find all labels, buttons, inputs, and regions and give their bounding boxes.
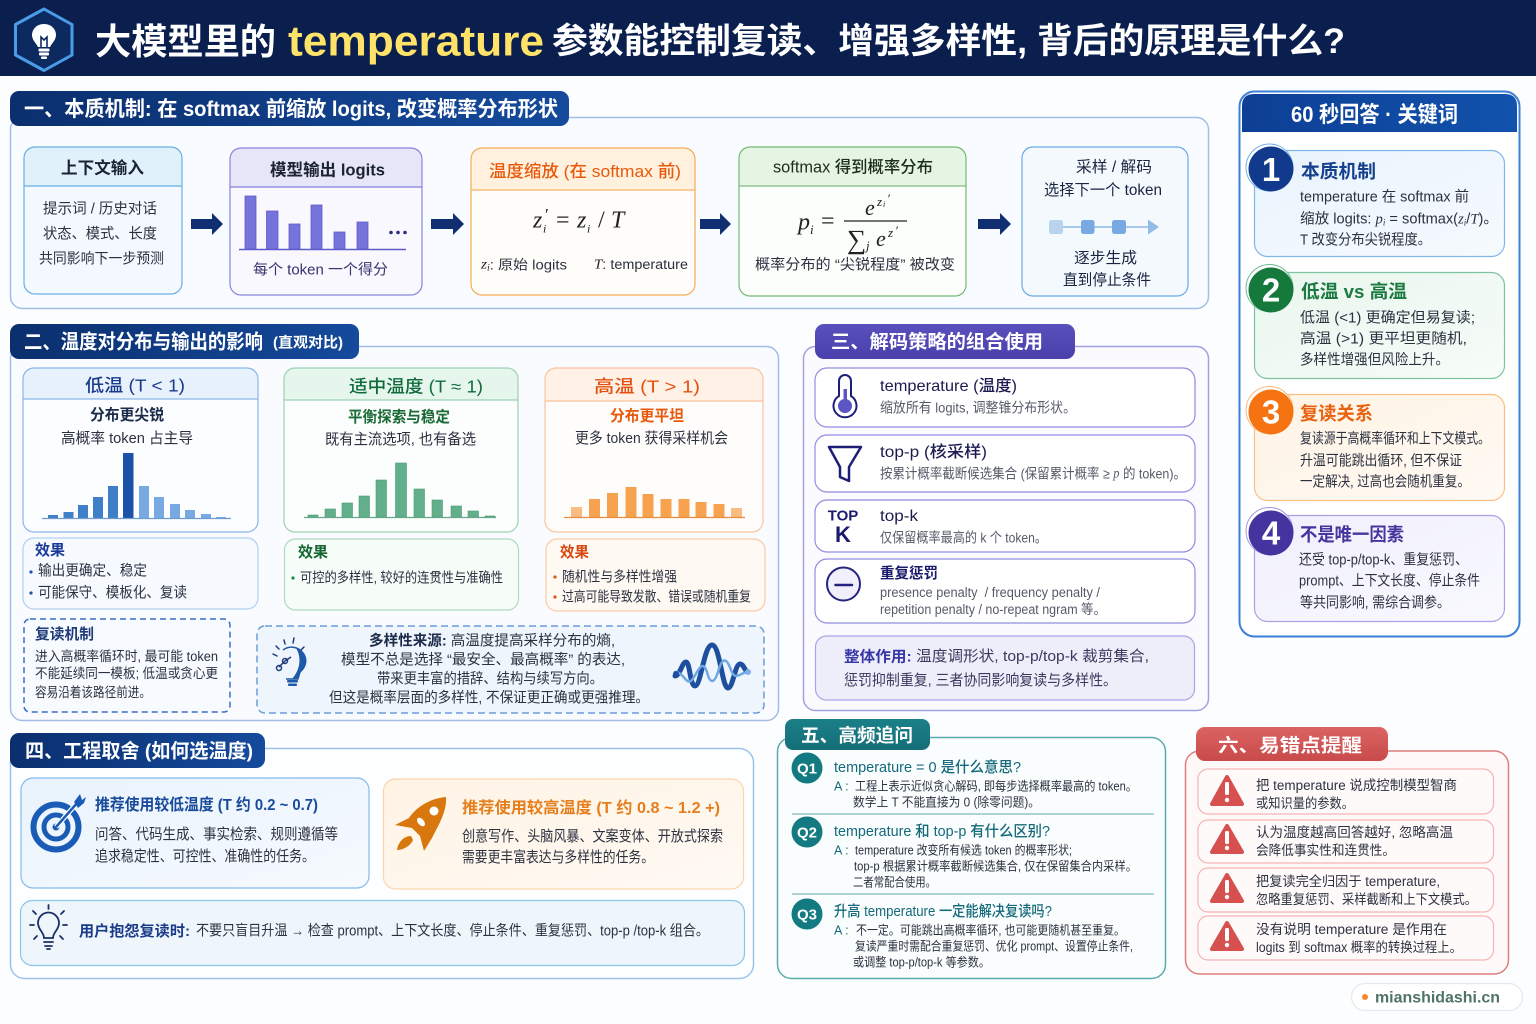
heading: section 4 (10, 733, 265, 768)
card: temperature scaling (471, 148, 695, 295)
card: high temperature recommendation (384, 779, 744, 889)
card: low temperature recommendation (21, 778, 369, 888)
arrow (431, 213, 464, 235)
mistake 4: logits 到 softmax 概率的转换过程上。 (1256, 939, 1462, 955)
title (95, 18, 1345, 66)
bar chart: logits (239, 196, 407, 250)
formula: scaling: z (532, 208, 543, 234)
card: 4 not only factor (1246, 508, 1504, 622)
Q3 (792, 898, 1133, 970)
panel: section 1 mechanism (10, 91, 1208, 308)
card: low temperature (23, 368, 258, 532)
Q1: Q1 (797, 760, 817, 778)
card: moderate temperature: 平衡探索与稳定 (348, 407, 450, 426)
card: high temperature recommendation: 创意写作、头脑风暴、文案变体、开放式探索 (462, 827, 723, 845)
card: 4 not only factor: 4 (1262, 514, 1281, 552)
panel: section 3 decoding strategies (804, 324, 1208, 710)
card: temperature scaling: T: temperature (594, 257, 688, 272)
card: high temperature: 分布更平坦 (610, 406, 684, 425)
card: softmax: softmax 得到概率分布 (773, 158, 933, 176)
callout: user complains about repetition: 不要只盲目升温 → 检查 prompt、上下文长度、停止条件、重复惩罚、top-p /top-k 组合。 (196, 922, 709, 940)
heading: section 1 (10, 91, 569, 126)
panel: section 6 common mistakes (1186, 727, 1508, 974)
Q3: 不一定。可能跳出高概率循环, 也可能更随机甚至重复。 (856, 922, 1125, 938)
card: 3 repetition: 一定解决, 过高也会随机重复。 (1300, 472, 1470, 490)
Q2: temperature 改变所有候选 token 的概率形状; (855, 842, 1072, 858)
card: low temperature: 低温 (T < 1) (85, 376, 185, 396)
card: 2 low vs high: 2 (1262, 272, 1280, 308)
card: low temperature: 高概率 token 占主导 (61, 430, 193, 447)
row: temperature: temperature (温度) (880, 376, 1017, 395)
Q1: temperature = 0 是什么意思? (834, 758, 1021, 776)
mistake 1: 把 temperature 说成控制模型智商 (1256, 778, 1457, 793)
icon: warning (1212, 777, 1242, 804)
card: high temperature: 更多 token 获得采样机会 (575, 430, 728, 447)
card: 3 repetition: 复读关系 (1300, 403, 1373, 424)
effect: high temperature: 效果 (560, 543, 589, 561)
row: repetition penalty: 重复惩罚 (880, 564, 938, 582)
title: 大模型里的 (95, 21, 276, 62)
card: sampling decode (1022, 147, 1188, 296)
card: 1 essence: = softmax( (1385, 212, 1458, 228)
card: 1 essence: 缩放 logits: p (1300, 212, 1383, 228)
effect: moderate temperature: 可控的多样性, 较好的连贯性与准确性 (300, 570, 503, 586)
effect: low temperature: 可能保守、模板化、复读 (38, 584, 187, 602)
row: repetition penalty (815, 559, 1195, 623)
icon: top k: K (835, 522, 851, 547)
card: 3 repetition (1246, 386, 1504, 500)
formula: softmax: e (876, 226, 886, 251)
icon: thermometer (834, 375, 856, 417)
callout: repetition mechanism: 进入高概率循环时, 最可能 token (35, 648, 218, 664)
effect: moderate temperature: 效果 (298, 543, 328, 561)
callout: user complains about repetition (20, 900, 744, 966)
Q3: Q3 (797, 906, 817, 924)
card: 1 essence: 本质机制 (1301, 161, 1376, 182)
icon: idea bulb (273, 638, 306, 686)
formula: scaling (532, 205, 626, 236)
row: temperature (815, 368, 1195, 427)
icon: top k (828, 508, 858, 547)
arrow (191, 213, 223, 235)
watermark pill: mianshidashi.cn (1375, 990, 1500, 1006)
card: context input: 状态、模式、长度 (43, 226, 157, 242)
formula: scaling: = (556, 208, 570, 234)
Q1: A : (834, 780, 849, 794)
callout: repetition mechanism: 复读机制 (35, 626, 94, 643)
icon: bulb outline (30, 905, 67, 949)
card: context input: 共同影响下一步预测 (39, 250, 164, 268)
card: moderate temperature (284, 368, 518, 532)
card: high temperature recommendation: 推荐使用较高温度 (T 约 0.8 ~ 1.2 +) (462, 798, 720, 817)
card: 2 low vs high: 低温 (<1) 更确定但易复读; (1300, 308, 1475, 326)
mistake 3: 把复读完全归因于 temperature, (1256, 873, 1440, 889)
arrow (978, 213, 1011, 235)
card: 4 not only factor: 还受 top-p/top-k、重复惩罚、 (1299, 550, 1468, 568)
formula: softmax: ∑ (847, 224, 866, 254)
formula: softmax: e (865, 195, 875, 220)
arrow (700, 213, 731, 235)
row: top-p: top-p (核采样) (880, 443, 987, 461)
formula: softmax: p (796, 210, 810, 236)
card: sampling decode: 采样 / 解码 (1076, 158, 1152, 176)
callout: source of diversity (257, 626, 764, 713)
Q1: 工程上表示近似贪心解码, 即每步选择概率最高的 token。 (855, 778, 1137, 794)
card: temperature scaling: : 原始 logits (490, 257, 567, 272)
mistake 4: 没有说明 temperature 是作用在 (1256, 922, 1447, 937)
card: model output logits: 每个 token 一个得分 (253, 262, 388, 278)
card: temperature scaling: z (480, 257, 488, 272)
effect: high temperature (546, 539, 765, 611)
card: moderate temperature: 既有主流选项, 也有备选 (325, 431, 476, 448)
title: 参数能控制复读、增强多样性, 背后的原理是什么? (552, 22, 1345, 61)
title: temperature (288, 18, 544, 66)
card: 1 essence: / (1466, 212, 1471, 228)
mistake 2: 认为温度越高回答越好, 忽略高温 (1256, 824, 1453, 840)
heading: section 5 (785, 719, 930, 750)
card: model output logits: 模型输出 logits (270, 160, 385, 180)
Q1: 数学上 T 不能直接为 0 (除零问题)。 (853, 794, 1040, 810)
row: top-k (815, 500, 1195, 552)
heading: section 5: 五、高频追问 (801, 725, 913, 746)
bar chart: high temperature distribution (564, 487, 745, 518)
card: 1 essence: T)。 (1470, 212, 1498, 228)
icon: warning (1212, 923, 1242, 949)
icon: top k: TOP (828, 508, 858, 524)
effect: low temperature (23, 538, 258, 609)
formula: scaling: i (543, 222, 546, 236)
card: low temperature recommendation: 问答、代码生成、事实检索、规则遵循等 (95, 825, 338, 843)
formula: softmax: z (887, 225, 893, 240)
bar chart: moderate temperature distribution (304, 463, 496, 518)
icon: warning (1212, 875, 1242, 901)
row: top-p: 按累计概率截断候选集合 (保留累计概率 ≥ p 的 token)。 (880, 466, 1186, 482)
callout: repetition mechanism: 不能延续同一模板; 低温或贪心更 (35, 666, 218, 681)
formula: scaling: T (611, 208, 626, 234)
card: 4 not only factor: 等共同影响, 需综合调参。 (1300, 594, 1450, 612)
callout: repetition mechanism: 容易沿着该路径前进。 (35, 684, 151, 700)
heading: section 4: 四、工程取舍 (如何选温度) (25, 740, 253, 762)
Q3: A : (834, 924, 849, 938)
icon: token chain (1049, 220, 1159, 234)
heading: 60 second answer (1242, 94, 1517, 132)
row: top-k: top-k (880, 508, 919, 525)
formula: scaling: i (587, 222, 590, 236)
row: repetition penalty: presence penalty / frequency penalty / (880, 585, 1100, 600)
Q2: temperature 和 top-p 有什么区别? (834, 823, 1050, 840)
heading: 60 second answer: 60 秒回答 · 关键词 (1291, 102, 1458, 127)
card: 1 essence: i (1383, 218, 1386, 228)
heading: section 3: 三、解码策略的组合使用 (831, 331, 1043, 353)
card: low temperature: 分布更尖锐 (90, 405, 164, 424)
Q3: 升高 temperature 一定能解决复读吗? (834, 902, 1052, 920)
card: 2 low vs high: 多样性增强但风险上升。 (1300, 352, 1449, 368)
watermark pill (1352, 984, 1522, 1010)
row: repetition penalty: repetition penalty / no-repeat ngram 等。 (880, 601, 1106, 617)
mistake 4 (1198, 916, 1494, 960)
row: temperature: 缩放所有 logits, 调整锥分布形状。 (880, 400, 1076, 416)
effect: high temperature: 过高可能导致发散、错误或随机重复 (562, 588, 751, 604)
icon: funnel (829, 447, 861, 481)
panel: section 4 engineering trade-offs (10, 733, 754, 978)
callout: overall effect: 惩罚抑制重复, 三者协同影响复读与多样性。 (844, 671, 1117, 689)
icon: rocket (395, 797, 446, 851)
callout: repetition mechanism (24, 619, 230, 712)
formula: softmax: ′ (895, 223, 898, 238)
icon: warning (1212, 826, 1242, 852)
icon: target (34, 794, 86, 850)
effect: low temperature: 输出更确定、稳定 (38, 562, 147, 580)
callout: overall effect: 整体作用: 温度调形状, top-p/top-k 裁剪集合, (844, 647, 1149, 665)
panel: 60 second answer (1240, 92, 1520, 636)
panel: section 5 follow-up questions (778, 719, 1166, 978)
card: softmax (739, 147, 966, 296)
card: temperature scaling: 温度缩放 (在 softmax 前) (489, 162, 681, 181)
callout: user complains about repetition: 用户抱怨复读时: (79, 922, 190, 940)
heading: section 1: 一、本质机制: 在 softmax 前缩放 logits, 改变概率分布形状 (24, 97, 558, 121)
card: 2 low vs high: 低温 vs 高温 (1301, 281, 1407, 302)
heading: section 2 (10, 324, 359, 359)
card: high temperature: 高温 (T > 1) (594, 376, 700, 396)
Q2: A : (834, 844, 849, 858)
callout: source of diversity: 但这是概率层面的多样性, 不保证更正确或更强推理。 (329, 690, 649, 706)
callout: overall effect (816, 636, 1194, 700)
card: 1 essence (1246, 144, 1504, 256)
mistake 2 (1198, 820, 1494, 863)
card: 2 low vs high (1246, 264, 1504, 378)
formula: softmax: ′ (887, 191, 890, 206)
Q2: Q2 (797, 824, 817, 842)
Q3: 或调整 top-p/top-k 等参数。 (853, 954, 990, 970)
card: high temperature (545, 368, 763, 532)
card: 1 essence: z (1457, 212, 1464, 228)
card: softmax: 概率分布的 “尖锐程度” 被改变 (755, 256, 955, 274)
card: low temperature recommendation: 推荐使用较低温度 (T 约 0.2 ~ 0.7) (95, 795, 318, 814)
card: temperature scaling: i (487, 262, 490, 272)
effect: low temperature: 效果 (35, 541, 65, 559)
card: context input (24, 147, 182, 294)
heading: section 2: (直观对比) (273, 334, 343, 352)
row: top-k: 仅保留概率最高的 k 个 token。 (880, 530, 1047, 546)
card: 1 essence: temperature 在 softmax 前 (1300, 188, 1469, 206)
card: moderate temperature: 适中温度 (T ≈ 1) (349, 376, 483, 396)
bar chart: low temperature distribution (42, 453, 231, 518)
card: sampling decode: 直到停止条件 (1063, 271, 1151, 289)
Q2: 二者常配合使用。 (853, 874, 936, 890)
mistake 3 (1198, 868, 1494, 912)
effect: high temperature: 随机性与多样性增强 (562, 568, 677, 584)
card: 4 not only factor: prompt、上下文长度、停止条件 (1299, 572, 1480, 590)
Q3: 复读严重时需配合重复惩罚、优化 prompt、设置停止条件, (855, 938, 1133, 954)
card: 3 repetition: 3 (1262, 394, 1280, 430)
heading: section 3 (815, 324, 1075, 359)
formula: softmax: = (821, 208, 835, 234)
card: 3 repetition: 复读源于高概率循环和上下文模式。 (1300, 430, 1490, 448)
card: 1 essence: i (1464, 218, 1467, 228)
icon: minus circle (827, 568, 860, 600)
Q2 (792, 816, 1137, 890)
card: low temperature recommendation: 追求稳定性、可控性、准确性的任务。 (95, 848, 315, 865)
Q2: top-p 根据累计概率截断候选集合, 仅在保留集合内采样。 (854, 858, 1137, 874)
icon: lightbulb in hexagon (16, 9, 72, 70)
mistake 2: 会降低事实性和连贯性。 (1256, 843, 1395, 858)
card: 3 repetition: 升温可能跳出循环, 但不保证 (1300, 452, 1462, 470)
row: top-p (815, 435, 1195, 492)
card: sampling decode: 选择下一个 token (1044, 181, 1162, 199)
card: 4 not only factor: 不是唯一因素 (1300, 524, 1404, 545)
card: 1 essence: T 改变分布尖锐程度。 (1300, 232, 1431, 248)
formula: scaling: ′ (544, 205, 548, 224)
formula: softmax: i (810, 222, 814, 237)
card: 1 essence: 1 (1262, 151, 1280, 188)
icon: wave signal (673, 645, 751, 688)
formula: softmax: i (883, 200, 885, 209)
card: model output logits (230, 148, 422, 295)
formula: softmax (796, 191, 907, 254)
formula: softmax: z (876, 194, 882, 209)
callout: source of diversity: 模型不总是选择 “最安全、最高概率” 的表达, (341, 650, 625, 668)
mistake 1 (1198, 769, 1494, 814)
card: high temperature recommendation: 需要更丰富表达与多样性的任务。 (462, 848, 654, 866)
card: 2 low vs high: 高温 (>1) 更平坦更随机, (1300, 330, 1467, 348)
mistake 3: 忽略重复惩罚、采样截断和上下文模式。 (1256, 891, 1477, 907)
card: sampling decode: 逐步生成 (1074, 249, 1137, 267)
panel: section 2 temperature impact (10, 324, 778, 720)
formula: scaling: z (576, 208, 587, 234)
effect: moderate temperature (284, 539, 518, 610)
formula: softmax: j (864, 238, 870, 253)
card: context input: 提示词 / 历史对话 (43, 200, 157, 218)
callout: source of diversity: 多样性来源: 高温度提高采样分布的熵, (369, 632, 615, 650)
heading: section 6 (1196, 727, 1388, 761)
heading: section 2: 二、温度对分布与输出的影响 (24, 330, 263, 354)
Q1 (792, 752, 1137, 810)
card: context input: 上下文输入 (61, 158, 145, 178)
formula: scaling: / (598, 208, 605, 234)
heading: section 6: 六、易错点提醒 (1218, 735, 1362, 756)
callout: source of diversity: 带来更丰富的措辞、结构与续写方向。 (377, 670, 603, 688)
header banner (0, 0, 1536, 76)
mistake 1: 或知识量的参数。 (1256, 795, 1354, 811)
